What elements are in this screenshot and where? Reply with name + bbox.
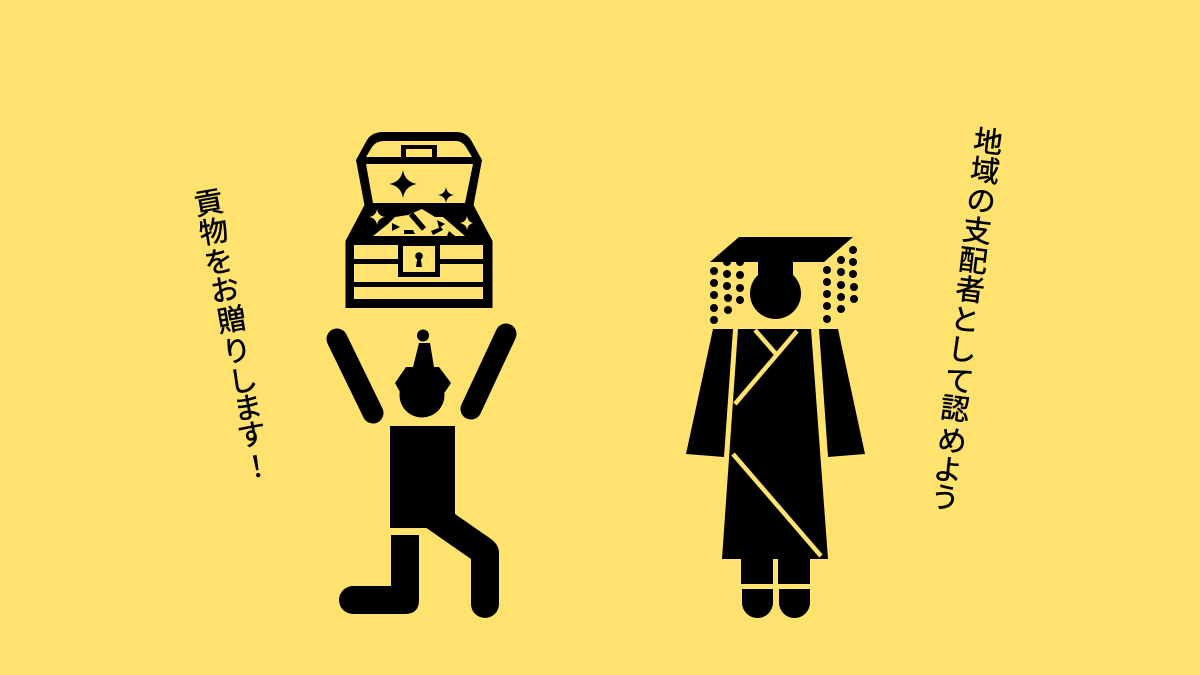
speech text: tribute <box>192 186 274 486</box>
speech text: recognition: 域 <box>969 153 1001 190</box>
raised arms <box>337 334 506 413</box>
lock plate <box>398 245 440 277</box>
speech text: recognition: の <box>965 184 997 220</box>
speech text: tribute: り <box>220 334 254 370</box>
legs and shoes <box>741 559 810 618</box>
figure: regional ruler <box>686 237 865 618</box>
figure: kneeling tribute bearer <box>337 330 506 618</box>
chest lid <box>356 132 482 208</box>
speech text: recognition: 者 <box>954 273 986 309</box>
speech text: tribute: 貢 <box>192 186 226 222</box>
hat bead curtains <box>710 246 858 324</box>
speech text: recognition <box>929 124 1004 517</box>
gold pile <box>373 209 465 236</box>
speech text: recognition: し <box>946 333 978 369</box>
speech text: recognition: 配 <box>957 244 989 280</box>
chest body <box>346 204 492 308</box>
speech text: tribute: 贈 <box>215 302 249 339</box>
speech text: recognition: よ <box>932 453 964 489</box>
icon: treasure chest <box>346 132 492 308</box>
speech text: recognition: て <box>943 364 975 400</box>
speech text: recognition: う <box>929 481 961 517</box>
speech text: tribute: を <box>202 245 236 281</box>
speech text: recognition: 支 <box>961 213 993 250</box>
speech text: tribute: す <box>235 418 269 454</box>
speech text: recognition: 認 <box>939 392 971 428</box>
speech text: tribute: 物 <box>197 214 231 251</box>
hat and head <box>710 237 853 319</box>
speech text: recognition: め <box>936 424 968 460</box>
speech text: tribute: ！ <box>240 450 274 486</box>
speech text: recognition: と <box>949 303 981 339</box>
robe <box>686 329 865 559</box>
speech text: recognition: 地 <box>972 124 1004 161</box>
headdress and head <box>395 330 451 418</box>
sparkles in lid <box>389 170 454 203</box>
speech text: tribute: ま <box>231 391 265 427</box>
yellow sparkles <box>369 209 473 230</box>
speech text: tribute: お <box>208 273 242 309</box>
speech text: tribute: し <box>226 364 260 400</box>
torso and legs <box>339 426 499 618</box>
